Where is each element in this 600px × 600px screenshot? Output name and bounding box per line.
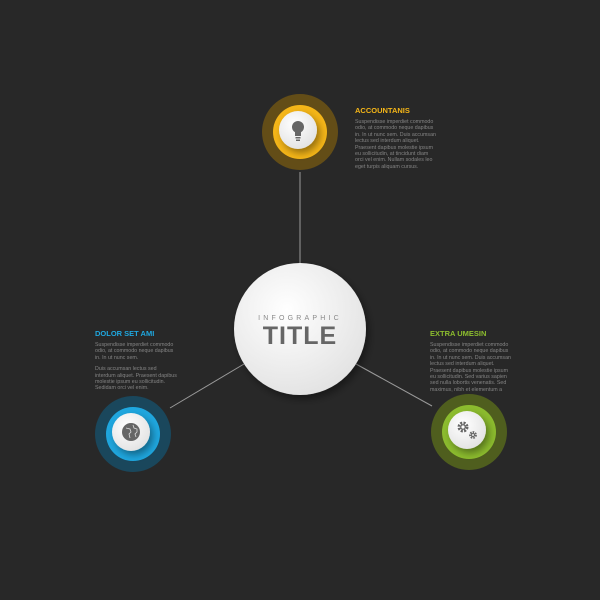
connector lines — [170, 172, 432, 408]
icon: light bulb — [292, 121, 304, 141]
node: dolor set ami — [95, 396, 171, 472]
node: extra umesin — [431, 394, 507, 470]
text: dolor set ami: DOLOR SET AMI — [95, 329, 154, 338]
icon: globe — [122, 423, 140, 441]
text: extra umesin: Suspendisse imperdiet commodo odio, at commodo neque dapibus in. In ut nunc sem. Duis accumsan lectus sed interdum aliquet. Praesent dapibus molestie ipsum eu sollicitudin. Sed varius sapien sed nulla lobortis venenatis. Sed maximus, nibh et elementum a — [430, 342, 511, 393]
text: accountanis: Suspendisse imperdiet commodo odio, at commodo neque dapibus in. In ut nunc sem. Duis accumsan lectus sed interdum aliquet. Praesent dapibus molestie ipsum eu sollicitudin, at tincidunt diam orci vel enim. Nullam sodales leo eget turpis aliquam cursus. — [355, 119, 436, 170]
center title circle: INFOGRAPHIC — [258, 315, 342, 322]
text: dolor set ami — [95, 329, 177, 391]
text: dolor set ami: Duis accumsan lectus sed interdum aliquet. Praesent dapibus molestie ipsum eu sollicitudin. Sedidam orci vel enim. — [95, 366, 177, 391]
center title circle: TITLE — [263, 322, 337, 350]
icon: gears — [459, 423, 476, 438]
node: accountanis — [262, 94, 338, 170]
text: extra umesin: EXTRA UMESIN — [430, 329, 486, 338]
text: accountanis: ACCOUNTANIS — [355, 106, 410, 115]
center title circle — [234, 263, 366, 395]
text: dolor set ami: Suspendisse imperdiet commodo odio, at commodo neque dapibus in. In ut nunc sem. — [95, 342, 173, 361]
